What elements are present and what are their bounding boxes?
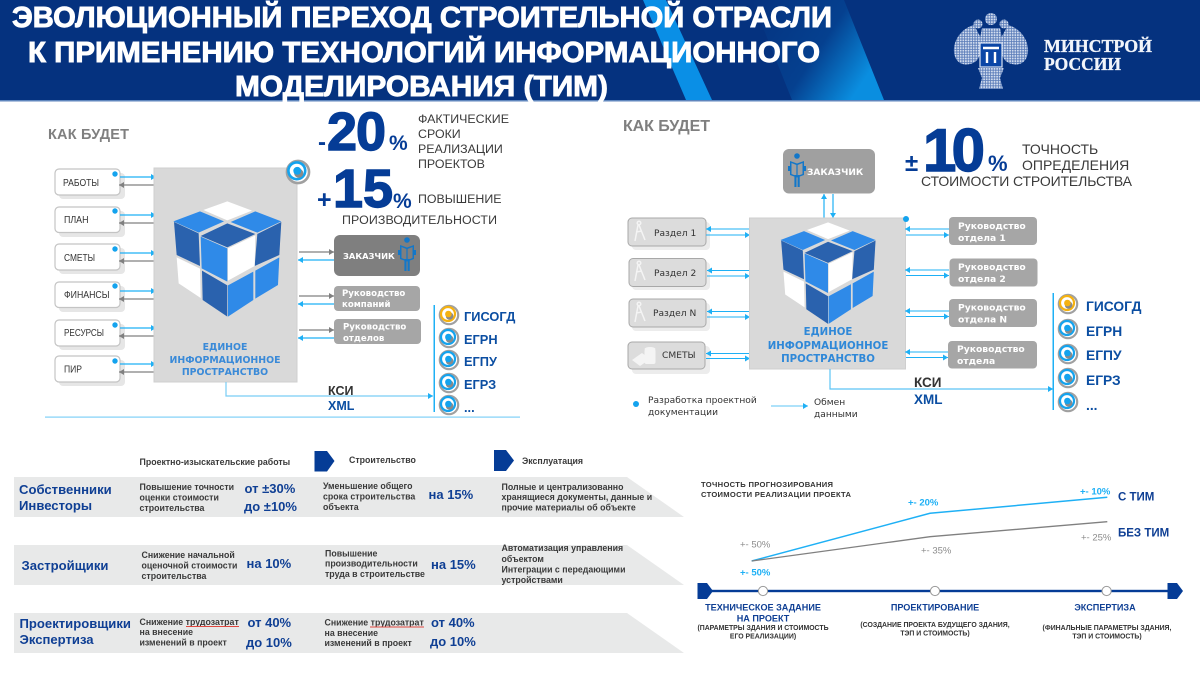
row: designers bbox=[14, 613, 684, 653]
line: with BIM bbox=[752, 497, 1107, 561]
stat: plus minus 10: 10 bbox=[923, 117, 985, 184]
legend: данными bbox=[814, 410, 858, 420]
stage headers: Проектно-изыскательские работы bbox=[140, 457, 290, 467]
chart labels: +- 50% bbox=[740, 540, 771, 550]
row: owners: хранящиеся документы, данные и bbox=[502, 492, 652, 502]
stage headers bbox=[140, 450, 583, 472]
chart labels: БЕЗ ТИМ bbox=[1118, 528, 1169, 540]
row: developers: оценочной стоимости bbox=[142, 560, 237, 570]
central space box: ЕДИНОЕ bbox=[804, 327, 852, 338]
source boxes: ПИР bbox=[64, 364, 82, 376]
registry list: ЕГРЗ bbox=[464, 377, 496, 392]
row: owners: от ±30% bbox=[244, 481, 296, 496]
stage: design: ПРОЕКТИРОВАНИЕ bbox=[891, 602, 979, 612]
box: department management bbox=[334, 319, 421, 344]
central space box: ПРОСТРАНСТВО bbox=[182, 367, 268, 378]
row: owners: строительства bbox=[140, 503, 205, 513]
row: developers: производительности bbox=[325, 558, 418, 568]
heading: right: КАК БУДЕТ bbox=[623, 118, 710, 135]
icon: corner marker bbox=[287, 161, 309, 183]
row: owners: оценки стоимости bbox=[140, 492, 219, 502]
central space box: ИНФОРМАЦИОННОЕ bbox=[170, 355, 280, 366]
logo text bbox=[1044, 36, 1152, 74]
row: owners: до ±10% bbox=[244, 499, 297, 514]
box: customer bbox=[334, 235, 420, 276]
stage: expertise: (ФИНАЛЬНЫЕ ПАРАМЕТРЫ ЗДАНИЯ, bbox=[1043, 625, 1172, 632]
connector: KSI XML bbox=[226, 382, 433, 413]
connector: KSI XML: КСИ bbox=[328, 384, 353, 398]
stat: minus 20: - bbox=[318, 129, 326, 156]
row: designers: изменений в проект bbox=[324, 638, 412, 648]
row: designers: Снижение трудозатрат bbox=[324, 618, 424, 628]
stage: technical assignment: (ПАРАМЕТРЫ ЗДАНИЯ И СТОИМОСТЬ bbox=[697, 625, 829, 632]
panel: benefits table bbox=[14, 450, 684, 653]
stat: minus 20: ФАКТИЧЕСКИЕ bbox=[418, 112, 509, 126]
row: developers bbox=[14, 543, 684, 585]
row: developers: объектом bbox=[502, 554, 544, 564]
source boxes: СМЕТЫ bbox=[64, 253, 95, 264]
chart title bbox=[701, 480, 852, 499]
row: developers: Интеграции с передающими bbox=[502, 564, 625, 574]
row: designers: до 10% bbox=[430, 634, 476, 649]
source boxes: ПЛАН bbox=[64, 215, 88, 226]
row: owners bbox=[14, 477, 684, 517]
stage: design: ТЭП И СТОИМОСТЬ) bbox=[900, 630, 970, 638]
heading: left: КАК БУДЕТ bbox=[48, 127, 129, 143]
stat: minus 20: СРОКИ bbox=[418, 127, 461, 141]
row: owners: прочие материалы об объекте bbox=[502, 502, 636, 512]
logo text: РОССИИ bbox=[1044, 54, 1121, 74]
arrows: customer link bbox=[824, 194, 833, 218]
registry list: ГИСОГД bbox=[1086, 299, 1142, 314]
panel: forecast accuracy chart bbox=[697, 480, 1183, 640]
department head boxes: отдела N bbox=[958, 314, 1007, 326]
registry list: ... bbox=[464, 400, 475, 415]
stat: minus 20: ПРОЕКТОВ bbox=[418, 157, 485, 171]
arrows: sections bbox=[706, 229, 750, 358]
stat: plus minus 10: % bbox=[988, 151, 1008, 176]
row: owners: Повышение точности bbox=[140, 482, 234, 492]
stage headers: Строительство bbox=[349, 455, 417, 465]
logo text: МИНСТРОЙ bbox=[1044, 36, 1152, 56]
section boxes bbox=[628, 218, 710, 374]
row: developers: Снижение начальной bbox=[142, 550, 235, 560]
chart labels: +- 35% bbox=[921, 546, 952, 556]
legend: Обмен bbox=[814, 398, 845, 408]
title: ЭВОЛЮЦИОННЫЙ ПЕРЕХОД СТРОИТЕЛЬНОЙ ОТРАСЛИ bbox=[12, 0, 832, 34]
section boxes: Раздел 2 bbox=[654, 269, 696, 279]
title: МОДЕЛИРОВАНИЯ (ТИМ) bbox=[235, 71, 608, 103]
panel: right diagram bbox=[623, 117, 1142, 420]
stat: plus minus 10: ОПРЕДЕЛЕНИЯ bbox=[1022, 157, 1129, 173]
registry list: ЕГПУ bbox=[464, 354, 498, 369]
arrows: sources bbox=[119, 177, 156, 372]
box: company management: компаний bbox=[342, 300, 390, 310]
row: designers: на внесение bbox=[324, 628, 378, 638]
connector: KSI XML: XML bbox=[328, 399, 355, 413]
central space box bbox=[750, 216, 909, 369]
stat: minus 20: 20 bbox=[327, 102, 386, 162]
department head boxes: Руководство bbox=[958, 262, 1026, 273]
source boxes: ФИНАНСЫ bbox=[64, 290, 110, 301]
box: company management: Руководство bbox=[342, 289, 405, 299]
stage: technical assignment: НА ПРОЕКТ bbox=[737, 614, 790, 624]
chart labels: +- 25% bbox=[1081, 532, 1112, 544]
arrows: customers bbox=[298, 252, 334, 338]
registry list: ГИСОГД bbox=[464, 309, 515, 324]
row: developers: на 15% bbox=[431, 557, 476, 572]
chart labels: С ТИМ bbox=[1118, 492, 1154, 504]
source boxes: РЕСУРСЫ bbox=[64, 328, 104, 339]
department head boxes: Руководство bbox=[958, 221, 1026, 232]
row: developers: на 10% bbox=[246, 556, 292, 571]
section boxes: Раздел 1 bbox=[654, 229, 696, 239]
section boxes: СМЕТЫ bbox=[662, 351, 696, 361]
department head boxes: отдела 1 bbox=[958, 233, 1006, 244]
stat: plus minus 10 bbox=[905, 117, 1133, 189]
department head boxes: отдела 2 bbox=[958, 274, 1006, 285]
central space box: ПРОСТРАНСТВО bbox=[781, 354, 875, 365]
stat: plus minus 10: ± bbox=[905, 150, 918, 177]
row: designers: Снижение трудозатрат bbox=[140, 617, 239, 627]
row: designers: Экспертиза bbox=[20, 632, 94, 647]
box: company management bbox=[334, 286, 420, 311]
stat: plus 15: % bbox=[393, 190, 412, 213]
row: developers: Застройщики bbox=[22, 558, 108, 573]
stage: design bbox=[860, 602, 1010, 638]
box: customer: ЗАКАЗЧИК bbox=[807, 168, 864, 178]
department head boxes: отдела bbox=[957, 356, 995, 367]
chart title: ТОЧНОСТЬ ПРОГНОЗИРОВАНИЯ bbox=[701, 480, 833, 489]
arrows: department heads bbox=[905, 229, 949, 358]
icon: emblem bbox=[954, 13, 1028, 89]
row: designers: изменений в проект bbox=[140, 638, 227, 648]
stat: plus 15: 15 bbox=[333, 159, 393, 219]
connector: KSI XML: КСИ bbox=[914, 375, 942, 390]
row: developers: устройствами bbox=[502, 575, 563, 585]
registry list: ЕГРН bbox=[1086, 324, 1122, 339]
department head boxes: Руководство bbox=[957, 344, 1025, 355]
stat: plus 15 bbox=[317, 159, 502, 227]
chart labels: +- 20% bbox=[908, 498, 939, 508]
section boxes: Раздел N bbox=[653, 309, 696, 319]
central space box: ЕДИНОЕ bbox=[203, 342, 247, 353]
registry list: ... bbox=[1086, 398, 1098, 413]
chart labels bbox=[740, 486, 1169, 578]
chart title: СТОИМОСТИ РЕАЛИЗАЦИИ ПРОЕКТА bbox=[701, 490, 852, 499]
chart labels: +- 50% bbox=[740, 568, 771, 578]
row: designers: Проектировщики bbox=[20, 616, 131, 631]
panel: left diagram bbox=[45, 102, 520, 418]
stat: plus 15: ПРОИЗВОДИТЕЛЬНОСТИ bbox=[342, 213, 497, 227]
stage: design: (СОЗДАНИЕ ПРОЕКТА БУДУЩЕГО ЗДАНИЯ, bbox=[860, 622, 1010, 629]
stat: plus 15: ПОВЫШЕНИЕ bbox=[418, 192, 502, 206]
row: designers: от 40% bbox=[431, 615, 475, 630]
stage: expertise bbox=[1043, 602, 1172, 640]
registry list: ЕГПУ bbox=[1086, 348, 1122, 363]
department head boxes: Руководство bbox=[958, 302, 1026, 314]
stage: technical assignment bbox=[697, 602, 829, 640]
central space box: ИНФОРМАЦИОННОЕ bbox=[768, 341, 888, 352]
stage: expertise: ЭКСПЕРТИЗА bbox=[1074, 602, 1136, 612]
registry list: ЕГРЗ bbox=[1086, 373, 1121, 388]
legend: Разработка проектной bbox=[648, 396, 757, 406]
row: owners: объекта bbox=[323, 502, 359, 512]
chart labels: +- 10% bbox=[1080, 486, 1111, 498]
connector: KSI XML bbox=[830, 369, 1053, 407]
row: developers: Повышение bbox=[325, 548, 378, 558]
row: developers: труда в строительстве bbox=[325, 569, 425, 579]
row: designers: до 10% bbox=[246, 635, 292, 650]
stat: plus minus 10: СТОИМОСТИ СТРОИТЕЛЬСТВА bbox=[921, 173, 1133, 189]
row: designers: от 40% bbox=[248, 615, 292, 630]
row: owners: срока строительства bbox=[323, 492, 415, 502]
box: customer bbox=[783, 149, 875, 194]
legend bbox=[633, 396, 858, 420]
department head boxes bbox=[948, 217, 1038, 368]
stat: plus minus 10: ТОЧНОСТЬ bbox=[1022, 141, 1098, 157]
source boxes bbox=[55, 169, 125, 386]
row: owners: Уменьшение общего bbox=[323, 481, 413, 491]
stat: minus 20: РЕАЛИЗАЦИИ bbox=[418, 142, 503, 156]
box: department management: Руководство bbox=[343, 322, 406, 332]
row: designers: на внесение bbox=[140, 627, 193, 637]
row: developers: строительства bbox=[142, 571, 207, 581]
registry list: ЕГРН bbox=[464, 332, 498, 347]
stage: technical assignment: ЕГО РЕАЛИЗАЦИИ) bbox=[730, 634, 796, 640]
row: owners: Инвесторы bbox=[19, 498, 92, 513]
row: owners: на 15% bbox=[428, 487, 474, 502]
line: without BIM bbox=[752, 522, 1107, 561]
central space box bbox=[154, 168, 297, 382]
title bbox=[12, 0, 832, 103]
title: К ПРИМЕНЕНИЮ ТЕХНОЛОГИЙ ИНФОРМАЦИОННОГО bbox=[28, 35, 820, 69]
stage headers: Эксплуатация bbox=[522, 456, 583, 466]
stat: minus 20: % bbox=[389, 132, 408, 155]
stage: technical assignment: ТЕХНИЧЕСКОЕ ЗАДАНИЕ bbox=[705, 602, 821, 612]
row: owners: Собственники bbox=[19, 482, 112, 497]
legend: документации bbox=[648, 408, 718, 418]
row: developers: Автоматизация управления bbox=[502, 543, 623, 553]
registry list bbox=[434, 305, 515, 415]
connector: KSI XML: XML bbox=[914, 392, 942, 407]
row: owners: Полные и централизованно bbox=[502, 482, 624, 492]
registry list bbox=[1052, 293, 1142, 413]
source boxes: РАБОТЫ bbox=[63, 178, 99, 189]
box: customer: ЗАКАЗЧИК bbox=[343, 251, 395, 261]
header band bbox=[0, 0, 1200, 102]
stat: minus 20 bbox=[318, 102, 509, 171]
box: department management: отделов bbox=[343, 334, 385, 344]
timeline bbox=[698, 583, 1183, 599]
stage: expertise: ТЭП И СТОИМОСТЬ) bbox=[1072, 634, 1142, 640]
stat: plus 15: + bbox=[317, 186, 332, 214]
